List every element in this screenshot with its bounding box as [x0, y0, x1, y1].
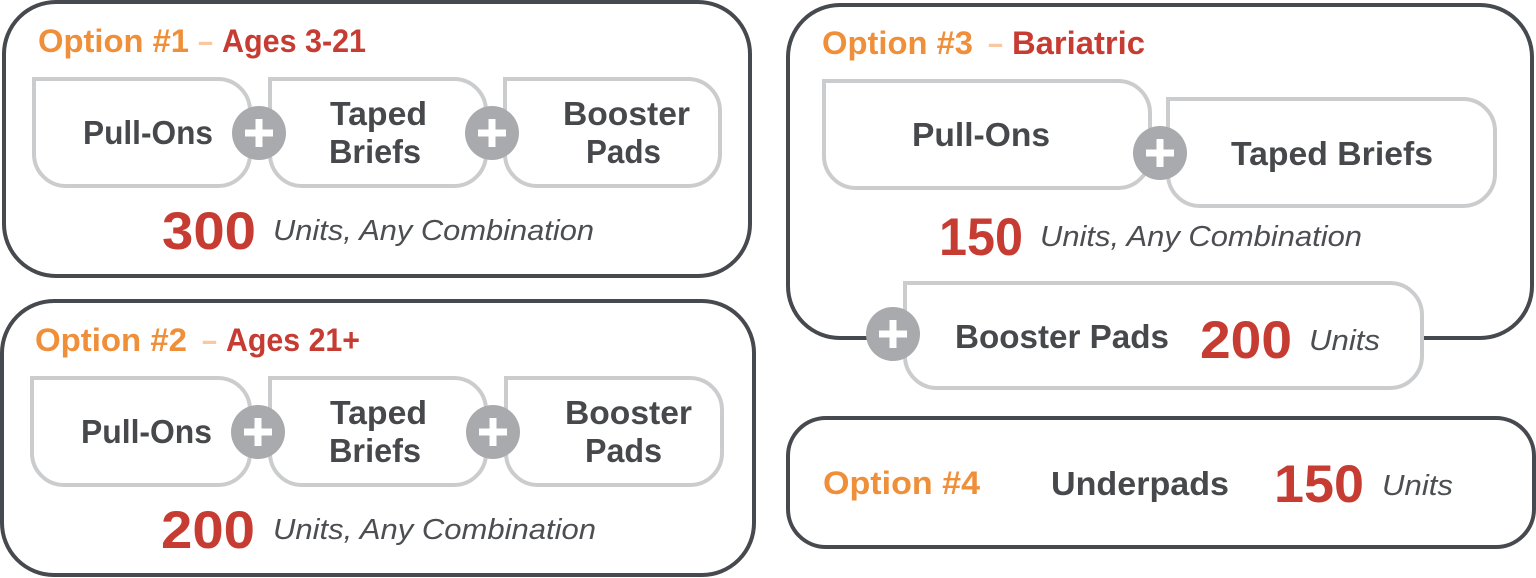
heading: option 3: Option #3 — [822, 25, 973, 61]
pill: booster pads — [506, 378, 722, 485]
label: taped briefs: Taped Briefs — [1231, 135, 1433, 172]
panel: option 1 — [4, 2, 750, 276]
pill: taped briefs — [1168, 99, 1495, 206]
heading: option 3: – — [988, 25, 1003, 61]
quantity: 150: 150 — [939, 208, 1023, 267]
label: pads: Pads — [586, 133, 661, 170]
pill: taped briefs — [270, 79, 486, 186]
icon: plus — [465, 106, 519, 160]
label: pull-ons: Pull-Ons — [81, 413, 212, 450]
panel: option 2 — [2, 301, 754, 575]
pill: pull-ons — [824, 81, 1150, 188]
label: briefs: Briefs — [329, 133, 421, 170]
icon: plus — [1133, 126, 1187, 180]
label: pull-ons: Pull-Ons — [83, 114, 213, 151]
heading: option 1: – — [198, 23, 213, 59]
quantity: 200: 200 — [161, 501, 255, 560]
label: pull-ons: Pull-Ons — [912, 116, 1050, 153]
heading: option 3 — [822, 25, 1145, 61]
quantity: 150: 150 — [1274, 455, 1364, 514]
label: taped: Taped — [330, 95, 427, 132]
label: taped: Taped — [330, 394, 427, 431]
heading: option 1: Ages 3-21 — [222, 23, 366, 59]
units text: Units — [1382, 470, 1453, 502]
heading: option 3: Bariatric — [1012, 25, 1145, 61]
units text: Units — [1309, 325, 1380, 357]
label: booster: Booster — [565, 394, 692, 431]
units text: Units, Any Combination — [273, 215, 594, 247]
label: briefs: Briefs — [329, 432, 421, 469]
units text: Units, Any Combination — [1040, 221, 1362, 253]
label: underpads: Underpads — [1051, 465, 1229, 502]
icon: plus — [231, 405, 285, 459]
heading: option 2: Ages 21+ — [226, 322, 360, 358]
units text: Units, Any Combination — [273, 514, 596, 546]
label: pads: Pads — [585, 432, 662, 469]
icon: plus — [232, 106, 286, 160]
heading: option 2: – — [202, 322, 217, 358]
pill: booster pads — [905, 283, 1422, 388]
pill: booster pads — [505, 79, 720, 186]
panel: option 3 — [788, 5, 1532, 388]
quantity: 200: 200 — [1200, 311, 1292, 370]
heading: option 1: Option #1 — [38, 23, 189, 59]
pill: pull-ons — [34, 79, 250, 186]
icon: plus — [466, 405, 520, 459]
icon: plus — [866, 307, 920, 361]
label: booster: Booster — [563, 95, 690, 132]
pill: taped briefs — [270, 378, 486, 485]
panel: option 4 — [788, 418, 1534, 547]
heading: option 2 — [35, 322, 360, 358]
pill: pull-ons — [32, 378, 250, 485]
heading: option 2: Option #2 — [35, 322, 187, 358]
heading: option 4: Option #4 — [823, 465, 980, 501]
label: booster pads: Booster Pads — [955, 318, 1169, 355]
quantity: 300: 300 — [162, 202, 256, 261]
heading: option 1 — [38, 23, 366, 59]
